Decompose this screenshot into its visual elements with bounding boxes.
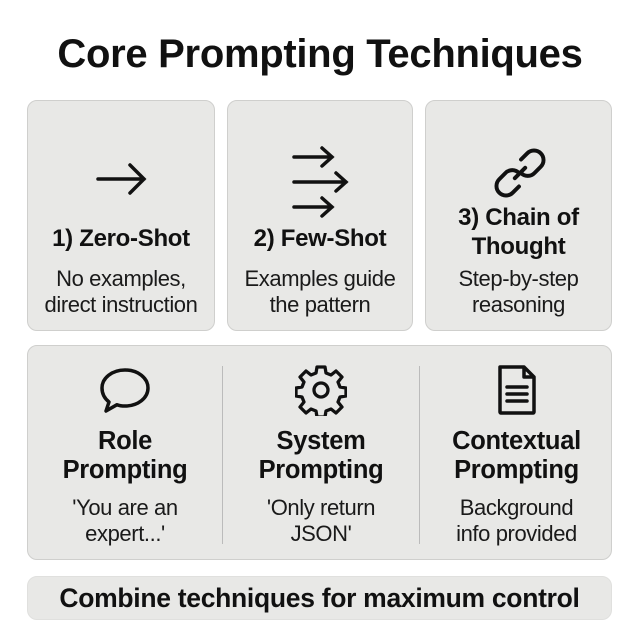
heading: Contextual [452, 427, 581, 455]
description: reasoning [472, 292, 565, 317]
description [267, 495, 375, 546]
description: Step-by-step [459, 266, 578, 291]
heading [452, 427, 581, 484]
description: Examples guide [245, 266, 395, 291]
footer callout [27, 576, 612, 620]
icon: gear [295, 365, 347, 416]
column: role prompting [63, 368, 187, 546]
column: system prompting [259, 365, 383, 546]
heading: 2) Few-Shot [254, 225, 386, 252]
description: 'You are an [72, 495, 178, 520]
description: info provided [456, 521, 577, 546]
icon: document [498, 365, 536, 415]
description: Background [460, 495, 573, 520]
panel: bottom techniques [27, 345, 612, 560]
description: direct instruction [44, 292, 197, 317]
heading: System [277, 427, 365, 455]
description [245, 266, 395, 317]
icon: speech bubble [100, 368, 150, 413]
panel: few-shot [227, 100, 413, 331]
description: expert...' [85, 521, 165, 546]
heading: Thought [472, 233, 565, 260]
panel: zero-shot [27, 100, 215, 331]
description [44, 266, 197, 317]
description [456, 495, 577, 546]
description: the pattern [270, 292, 370, 317]
heading: Prompting [259, 456, 383, 484]
heading: Prompting [454, 456, 579, 484]
heading: Role [98, 427, 152, 455]
panel: chain of thought [425, 100, 612, 331]
description: No examples, [56, 266, 186, 291]
heading: Prompting [63, 456, 187, 484]
description: JSON' [291, 521, 351, 546]
heading: 3) Chain of [458, 204, 579, 231]
heading [259, 427, 383, 484]
description [72, 495, 178, 546]
heading: 1) Zero-Shot [52, 225, 190, 252]
icon: chain link [494, 148, 546, 198]
column: contextual prompting [452, 365, 581, 546]
heading [63, 427, 187, 484]
icon: arrow [96, 163, 146, 195]
title: Core Prompting Techniques [57, 32, 583, 76]
description [459, 266, 578, 317]
heading [458, 204, 580, 260]
footer callout: Combine techniques for maximum control [59, 583, 580, 613]
icon: triple arrows [292, 146, 348, 218]
description: 'Only return [267, 495, 375, 520]
